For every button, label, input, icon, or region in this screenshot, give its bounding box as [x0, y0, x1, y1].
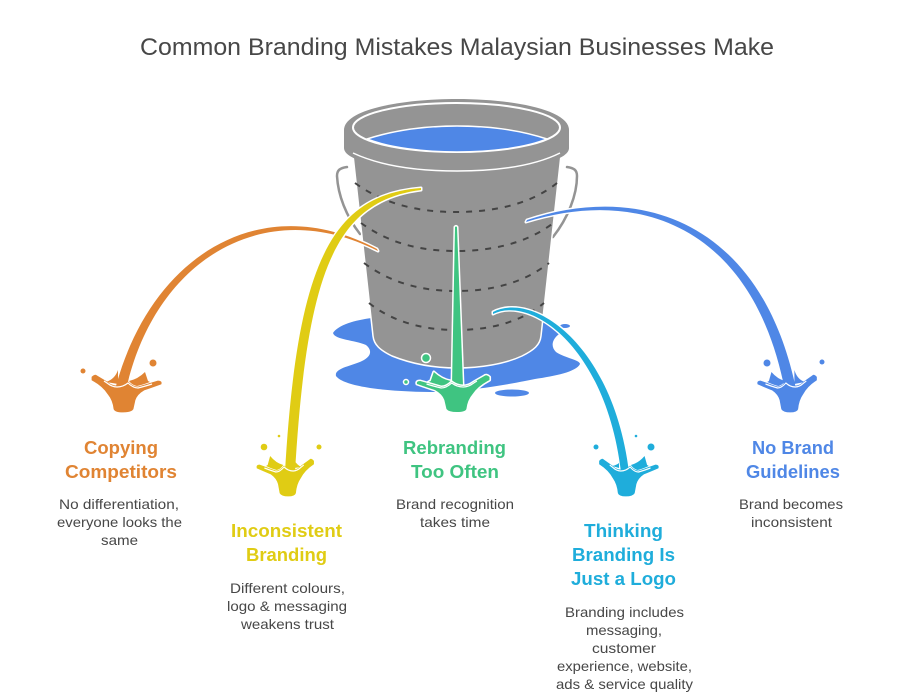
text block: no brand guidelines — [739, 438, 843, 530]
description: takes time — [420, 514, 490, 530]
splash: green — [404, 354, 490, 412]
description: messaging, — [586, 622, 662, 638]
description: Brand becomes — [739, 496, 843, 512]
bucket — [337, 99, 577, 368]
bucket body — [353, 155, 561, 368]
description: ads & service quality — [556, 676, 693, 692]
heading: Branding Is — [572, 545, 675, 565]
description — [57, 496, 182, 548]
water in bucket — [367, 126, 547, 152]
heading — [746, 438, 840, 482]
description: customer — [592, 640, 656, 656]
heading: Rebranding — [403, 438, 506, 458]
heading: Thinking — [584, 521, 663, 541]
description: weakens trust — [240, 616, 334, 632]
water puddle — [333, 318, 580, 396]
bucket handles — [337, 167, 577, 237]
heading: Copying — [84, 438, 158, 458]
description — [556, 604, 693, 692]
text block: inconsistent branding — [227, 521, 347, 632]
heading — [231, 521, 342, 565]
description: No differentiation, — [59, 496, 179, 512]
description — [227, 580, 347, 632]
heading — [403, 438, 506, 482]
stream: blue — [526, 207, 796, 391]
heading: No Brand — [752, 438, 834, 458]
splash: yellow — [257, 435, 322, 496]
text block: thinking branding is just a logo — [556, 521, 693, 692]
stream: yellow — [285, 188, 421, 472]
heading: Guidelines — [746, 462, 840, 482]
splash: orange — [80, 360, 161, 412]
description: Brand recognition — [396, 496, 514, 512]
description: experience, website, — [557, 658, 692, 674]
stream: cyan — [493, 308, 629, 472]
splash: cyan — [594, 435, 658, 496]
bucket rim — [344, 99, 569, 172]
description: inconsistent — [751, 514, 832, 530]
description: logo & messaging — [227, 598, 347, 614]
description: Branding includes — [565, 604, 684, 620]
heading: Just a Logo — [571, 569, 676, 589]
stream: green — [452, 226, 463, 386]
description — [396, 496, 514, 530]
description: everyone looks the — [57, 514, 182, 530]
heading: Branding — [246, 545, 327, 565]
heading: Too Often — [411, 462, 499, 482]
splash: blue — [758, 360, 824, 412]
bucket seams — [355, 183, 557, 330]
description: Different colours, — [230, 580, 345, 596]
heading: Competitors — [65, 462, 177, 482]
heading: Inconsistent — [231, 521, 342, 541]
text block: copying competitors — [57, 438, 182, 548]
heading — [65, 438, 177, 482]
text block: rebranding too often — [396, 438, 514, 530]
heading — [571, 521, 676, 589]
description — [739, 496, 843, 530]
stream: orange — [116, 226, 378, 386]
description: same — [101, 532, 138, 548]
title: Common Branding Mistakes Malaysian Businesses Make — [140, 34, 774, 61]
